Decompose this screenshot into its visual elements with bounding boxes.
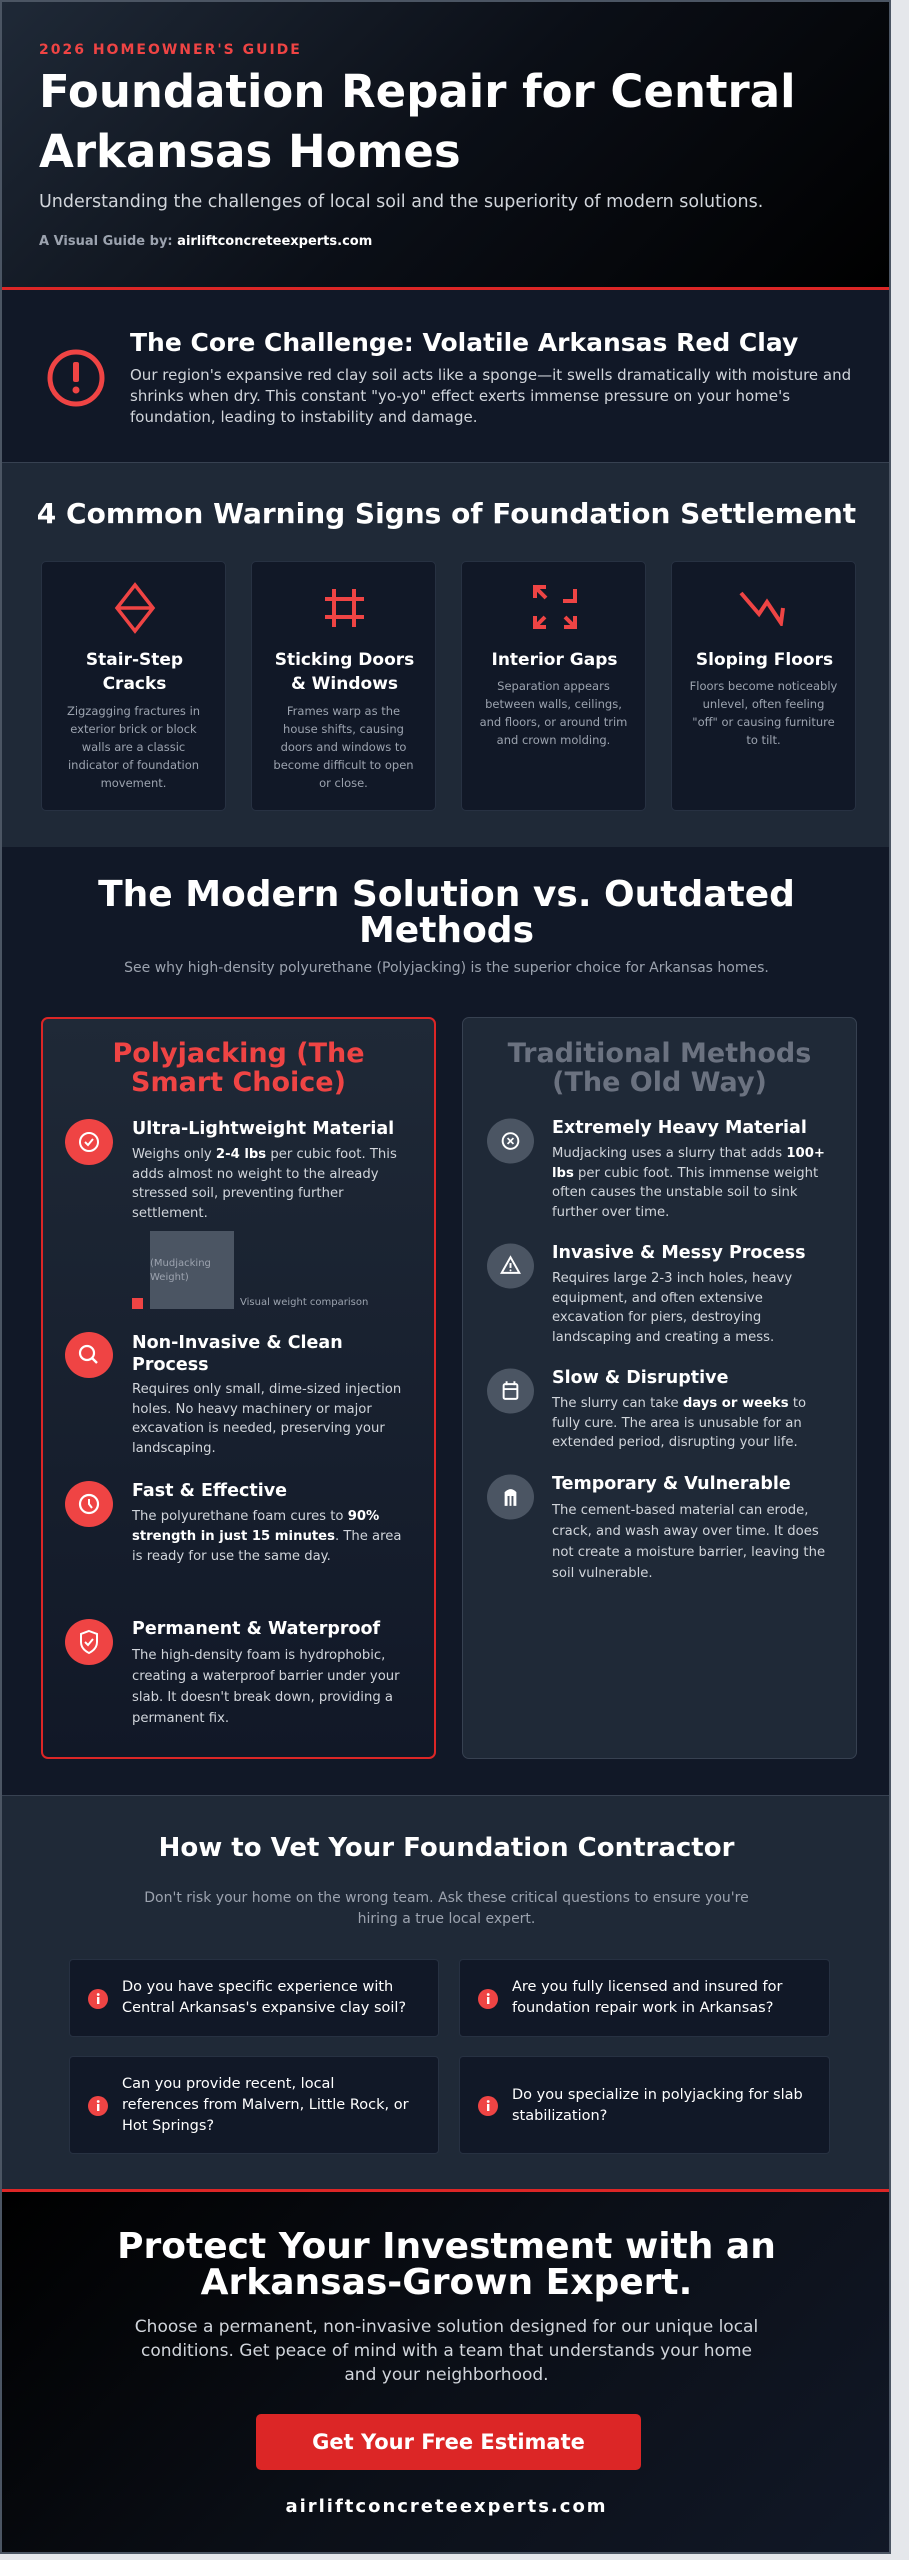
icon: info	[478, 1989, 498, 2009]
item: slow	[487, 1368, 806, 1450]
icon: info	[478, 2096, 498, 2116]
icon: clock	[65, 1481, 113, 1527]
item: slow: The slurry can take days or weeks to fully cure. The area is unusable for an extended period, disrupting your life.	[552, 1396, 806, 1450]
icon: warning triangle	[487, 1244, 534, 1288]
card: interior gaps	[461, 561, 646, 811]
icon: calendar	[487, 1368, 534, 1414]
body text: Our region's expansive red clay soil acts like a sponge—it swells dramatically with moisture and shrinks when dry. This constant "yo-yo" effect exerts immense pressure on your home's foundation, leading to instability and damage.	[130, 366, 851, 426]
chart: weight comparison: Visual weight comparison	[240, 1297, 368, 1308]
chart: weight comparison: (Mudjacking Weight)	[150, 1258, 211, 1283]
heading: The Modern Solution vs. Outdated	[98, 874, 795, 915]
heading: How to Vet Your Foundation Contractor	[159, 1833, 734, 1863]
body text: Choose a permanent, non-invasive solution designed for our unique local	[135, 2317, 758, 2337]
card: stair-step cracks: Cracks	[103, 674, 166, 694]
item: permanent: The high-density foam is hydrophobic, creating a waterproof barrier under your slab. It doesn't break down, providing a permanent fix.	[132, 1648, 400, 1726]
question card 4	[459, 2056, 830, 2154]
byline: A Visual Guide by: airliftconcreteexperts.com	[39, 234, 372, 249]
subtitle: Understanding the challenges of local soil and the superiority of modern solutions.	[39, 192, 763, 212]
body text: conditions. Get peace of mind with a team that understands your home	[141, 2341, 752, 2361]
icon: check circle	[65, 1119, 113, 1165]
panel title: (The Old Way)	[552, 1067, 767, 1098]
item: invasive: Invasive & Messy Process	[552, 1243, 806, 1263]
heading: Protect Your Investment with an	[117, 2226, 776, 2267]
icon: search	[65, 1332, 113, 1378]
button: Get Your Free Estimate	[312, 2430, 585, 2454]
heading: Methods	[359, 910, 534, 951]
item: heavy	[487, 1118, 825, 1220]
card: stair-step cracks: Zigzagging fractures in exterior brick or block walls are a classic indicator of foundation movement.	[67, 704, 200, 790]
button	[256, 2414, 641, 2470]
icon: hash frame	[325, 589, 364, 627]
question card 2	[459, 1959, 830, 2037]
panel: traditional methods	[462, 1017, 857, 1759]
panel: vet contractor	[2, 1795, 891, 2189]
item: heavy: Extremely Heavy Material	[552, 1118, 807, 1138]
panel title: Smart Choice)	[131, 1067, 346, 1098]
icon: exclamation circle	[48, 350, 104, 406]
panel: modern vs outdated	[2, 847, 891, 1795]
item: invasive	[487, 1243, 806, 1344]
question card 2: Are you fully licensed and insured for foundation repair work in Arkansas?	[512, 1979, 782, 2016]
heading: The Core Challenge: Volatile Arkansas Red Clay	[130, 328, 798, 357]
question card 4: Do you specialize in polyjacking for slab stabilization?	[512, 2087, 803, 2124]
question card 3	[69, 2056, 439, 2154]
icon: expand arrows	[533, 585, 577, 629]
item: lightweight: Ultra-Lightweight Material	[132, 1119, 394, 1139]
question card 3: references from Malvern, Little Rock, or Hot Springs?	[122, 2097, 409, 2134]
card: interior gaps: Interior Gaps	[492, 650, 618, 670]
icon: crumbling block	[487, 1474, 534, 1520]
item: permanent	[65, 1619, 400, 1726]
card: sticking doors: Frames warp as the house shifts, causing doors and windows to become difficult to open or close.	[273, 704, 414, 790]
panel title: Traditional Methods	[508, 1038, 811, 1069]
heading	[117, 2226, 776, 2303]
item: slow: Slow & Disruptive	[552, 1368, 728, 1388]
panel: polyjacking	[41, 1017, 436, 1759]
item: invasive: Requires large 2-3 inch holes, heavy equipment, and often extensive excavation for piers, destroying landscaping and creating a mess.	[552, 1271, 792, 1344]
panel: call to action	[2, 2189, 891, 2556]
subheading: See why high-density polyurethane (Polyjacking) is the superior choice for Arkansas homes.	[124, 960, 769, 976]
card: interior gaps: Separation appears between walls, ceilings, and floors, or around trim and crown molding.	[480, 679, 627, 747]
item: temporary: Temporary & Vulnerable	[552, 1474, 791, 1494]
icon: zigzag trend	[740, 592, 785, 626]
heading: 4 Common Warning Signs of Foundation Settlement	[37, 497, 856, 530]
card: sticking doors: Sticking Doors	[275, 650, 414, 670]
panel: core challenge	[2, 290, 891, 462]
heading: Arkansas-Grown Expert.	[201, 2262, 692, 2303]
item: lightweight: Weighs only 2-4 lbs per cubic foot. This adds almost no weight to the already stressed soil, preventing further settlement.	[132, 1147, 397, 1220]
heading	[98, 874, 795, 951]
main title: Foundation Repair for Central	[39, 65, 796, 118]
icon: info	[88, 2096, 108, 2116]
item: fast: The polyurethane foam cures to 90% strength in just 15 minutes. The area is ready for use the same day.	[132, 1509, 401, 1564]
card: sloping floors	[671, 561, 856, 811]
card: sticking doors: & Windows	[291, 674, 398, 694]
website url: airliftconcreteexperts.com	[285, 2496, 608, 2517]
question card 1	[69, 1959, 439, 2037]
eyebrow label: 2026 HOMEOWNER'S GUIDE	[39, 42, 302, 58]
icon: info	[88, 1989, 108, 2009]
item: permanent: Permanent & Waterproof	[132, 1619, 380, 1639]
main title	[39, 65, 796, 178]
question card 3: Can you provide recent, local	[122, 2076, 334, 2092]
panel title: Polyjacking (The	[112, 1038, 365, 1069]
item: non-invasive: Process	[132, 1355, 209, 1375]
body text	[135, 2317, 758, 2385]
panel title	[508, 1038, 811, 1098]
card: stair-step cracks	[41, 561, 226, 811]
item: heavy: Mudjacking uses a slurry that adds 100+ lbs per cubic foot. This immense weight often causes the unstable soil to sink further over time.	[552, 1146, 825, 1220]
icon: diamond	[114, 582, 156, 634]
header section	[2, 2, 891, 290]
body text: and your neighborhood.	[344, 2365, 549, 2385]
item: non-invasive: Requires only small, dime-sized injection holes. No heavy machinery or major excavation is needed, preserving your landscaping.	[132, 1382, 401, 1456]
panel title	[112, 1038, 365, 1098]
icon: shield	[65, 1619, 113, 1665]
item: temporary: The cement-based material can erode, crack, and wash away over time. It does not create a moisture barrier, leaving the soil vulnerable.	[552, 1503, 825, 1581]
chart: weight comparison	[132, 1231, 368, 1309]
card: sloping floors: Sloping Floors	[696, 650, 833, 670]
main title: Arkansas Homes	[39, 125, 461, 178]
card: sloping floors: Floors become noticeably unlevel, often feeling "off" or causing furniture to tilt.	[690, 679, 837, 747]
card: stair-step cracks: Stair-Step	[86, 650, 183, 670]
item: non-invasive	[65, 1332, 401, 1456]
icon: x circle	[487, 1118, 534, 1164]
subheading: Don't risk your home on the wrong team. Ask these critical questions to ensure you're hiring a true local expert.	[144, 1890, 749, 1927]
question card 1: Do you have specific experience with Central Arkansas's expansive clay soil?	[122, 1979, 406, 2016]
item: lightweight	[65, 1119, 397, 1309]
item: fast: Fast & Effective	[132, 1481, 287, 1501]
item: non-invasive: Non-Invasive & Clean	[132, 1333, 343, 1353]
card: sticking doors	[251, 561, 436, 811]
panel: warning signs	[2, 462, 891, 847]
item: temporary	[487, 1474, 825, 1581]
item: fast	[65, 1481, 401, 1564]
